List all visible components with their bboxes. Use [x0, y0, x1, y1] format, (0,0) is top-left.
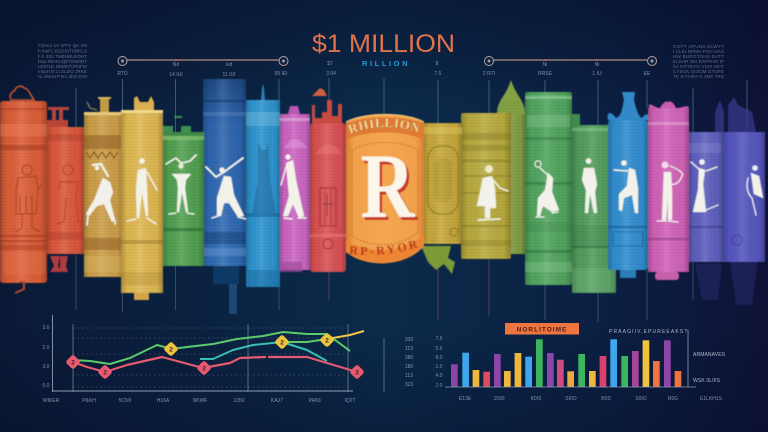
x axis labels: 1500 [493, 396, 505, 402]
y axis labels: 113 [405, 373, 413, 379]
curved heading: RHILLION: RHILLION [347, 118, 421, 134]
markers: 2 [280, 340, 284, 346]
timeline: left: 14 IUI [169, 72, 183, 78]
timeline: right: Ni [543, 62, 547, 68]
figure: dress figure on violet [691, 159, 718, 212]
markers: 2 [355, 370, 359, 376]
curved footer text: RP-RYOR [349, 240, 418, 256]
y axis labels: 380 [405, 355, 413, 361]
figure: etched statue [323, 194, 333, 216]
timeline: right: 8 [436, 61, 439, 67]
scroll: green short [572, 114, 616, 293]
x axis labels: R0G [668, 396, 678, 402]
figure: harpist on olive [477, 165, 508, 220]
figure: seated figure on periwinkle [747, 165, 763, 215]
y axis labels [405, 336, 443, 389]
text block: left notes: LESTLE. DRWOTJFUFW [38, 64, 88, 69]
y axis labels: 180 [405, 364, 413, 370]
y axis labels: 323 [405, 382, 413, 388]
text block: right notes: HW BURGTOHS DATT [673, 54, 724, 59]
scroll: green [163, 116, 204, 266]
timeline: left: Ivd [226, 62, 233, 68]
markers: 2 [169, 346, 173, 354]
timeline: right: RRSE [538, 71, 553, 77]
x axis labels: IQ2T [344, 398, 356, 404]
x axis labels: NKWF [193, 398, 207, 404]
figure: arms-up man on green [166, 155, 196, 214]
y axis labels: 113 [405, 346, 413, 352]
timeline: left: 11 IUI [223, 72, 235, 78]
title: $1 MILLION [312, 30, 455, 58]
figure: etched man on orange [15, 165, 42, 232]
series: green upper [282, 339, 327, 342]
y axis labels: 8.0 [436, 355, 443, 361]
text block: right notes: t CLIH DPMH FOG NAS [673, 49, 724, 54]
legend labels: WSK 0L0IS [693, 378, 721, 384]
timeline: right: 7.5 [435, 71, 442, 77]
y axis labels [43, 325, 50, 389]
legend labels [693, 352, 726, 384]
timeline: left: $7 [327, 61, 333, 67]
scroll: green tall [525, 92, 572, 285]
y axis labels: 0.0 [43, 383, 50, 389]
text block: left notes: h tneFL tSGUUTHBKLS [38, 48, 87, 54]
line chart [43, 315, 365, 404]
scroll: gold [84, 97, 123, 277]
timeline: left: 3 04 [326, 71, 336, 77]
scroll: violet [689, 132, 723, 300]
figure: dancer on green [535, 161, 559, 217]
text block: left notes: Fyksul 16 WTS QK D8 [38, 43, 87, 48]
scroll: pink [648, 101, 689, 280]
text block: right notes: TK D FHRA S 3NE TKD [673, 74, 725, 79]
figure: man on pink [657, 162, 682, 222]
scrolls [0, 78, 766, 314]
chart axes and grid [52, 315, 353, 392]
scroll: bright blue [608, 92, 649, 278]
y axis labels: 5.5 [436, 346, 443, 352]
x axis labels [459, 396, 723, 402]
timeline: left: 99 IEI [274, 71, 288, 77]
x axis labels: KAJ7 [271, 398, 283, 404]
x axis labels: 5CN0 [119, 398, 132, 404]
timeline: right: 1 IU [592, 71, 602, 77]
figure: man on yellow [127, 158, 157, 224]
figure: dancer on gold [86, 164, 115, 225]
text block: right notes: ELKHR SKI ESPPHO IP [673, 59, 724, 64]
connector lines [76, 78, 747, 322]
markers: 2 [103, 370, 107, 376]
y axis labels: 1.0 [436, 364, 443, 370]
figure: standing man on green [582, 158, 597, 213]
markers [65, 332, 365, 380]
series: green [73, 332, 350, 364]
icon: green serpent ornament [421, 246, 455, 274]
markers: 2 [325, 338, 329, 344]
scroll: red [47, 107, 84, 272]
series: red [73, 357, 357, 372]
scroll: red right of centre [310, 88, 346, 272]
chart divider [383, 338, 385, 392]
x axis labels: 1350 [233, 398, 245, 404]
bar chart badge [505, 323, 579, 334]
timeline: right: EE [644, 71, 651, 77]
bar chart [405, 323, 726, 402]
text block: left notes: bmp RIHSUQETOMSRT [38, 59, 87, 64]
y axis labels: 4.0 [436, 373, 443, 379]
text block: left notes [38, 43, 88, 79]
x axis labels [43, 398, 356, 404]
y axis labels: 2.0 [436, 383, 443, 389]
x axis labels: H16A [157, 398, 170, 404]
timeline: right [435, 56, 656, 77]
text block: right notes: CGPT OFUNS ELWYT [673, 44, 724, 49]
x axis labels: B0S [601, 396, 611, 402]
legend labels: ARMANAVES [693, 352, 726, 358]
timeline: left: RTO [117, 71, 128, 77]
scroll: light blue [246, 84, 280, 287]
timeline: left: Nd [173, 62, 179, 68]
x axis labels: WIKER [43, 398, 60, 404]
series: teal [200, 342, 327, 361]
scroll: yellow [121, 96, 163, 300]
y axis labels: 3.0 [43, 364, 50, 370]
text block: left notes: mkprt kl Lt ZLDO JRKE [38, 69, 87, 74]
x axis labels: S6IO [565, 396, 577, 402]
y axis labels: 7.5 [436, 336, 443, 342]
scroll: olive gold [461, 113, 511, 259]
bar chart axis [445, 330, 696, 387]
x axis labels: E13E [459, 396, 472, 402]
figure: dancer on blue [206, 158, 246, 219]
scroll: yellow olive [421, 123, 462, 274]
scroll: magenta [280, 106, 310, 272]
x axis labels: K0IS [531, 396, 542, 402]
scroll: orange red [0, 86, 47, 293]
scroll: periwinkle [715, 97, 765, 305]
subtitle: RILLION [362, 59, 409, 68]
text block: right notes: hA NTTEVO VSIK MAT [673, 64, 724, 69]
text block: left notes: h h 33S TMEHBUEDRT [38, 54, 87, 59]
timeline: right: Ni [595, 62, 599, 68]
text block: right notes [673, 44, 725, 79]
scroll: olive green behind [497, 80, 525, 254]
figure: bowing man on blue [614, 160, 638, 213]
y axis labels: 333 [405, 337, 413, 343]
markers: 2 [71, 360, 75, 366]
legend heading: PRAAGIIV.EPUREEAKS? [609, 329, 687, 335]
timeline: left [117, 56, 336, 78]
figure: etched man on red [57, 165, 84, 224]
letter R monogram: R [363, 138, 418, 240]
text block: left notes: nL 1MLM P M L 3N2 SYD [38, 74, 88, 79]
y axis labels: 3.0 [43, 325, 50, 331]
letter R monogram: R [360, 135, 416, 237]
markers: 2 [202, 366, 206, 372]
x axis labels: PAN1 [309, 398, 322, 404]
scroll: dark blue tower [203, 79, 246, 314]
text block: right notes: CYSCK GIJCIM GTOFE [673, 69, 724, 74]
bar chart badge: NORLITOIME [517, 326, 567, 334]
x axis labels: E1LKH1S [700, 396, 723, 402]
timeline: right: 2 RTI [483, 71, 495, 77]
x axis labels: S0IO [635, 396, 647, 402]
figure: walker on magenta [281, 154, 306, 219]
scroll: centre medallion [345, 113, 425, 264]
y axis labels: 2.0 [43, 345, 50, 351]
x axis labels: P&KH [82, 398, 96, 404]
series: yellow [327, 331, 364, 339]
bars [451, 339, 681, 387]
